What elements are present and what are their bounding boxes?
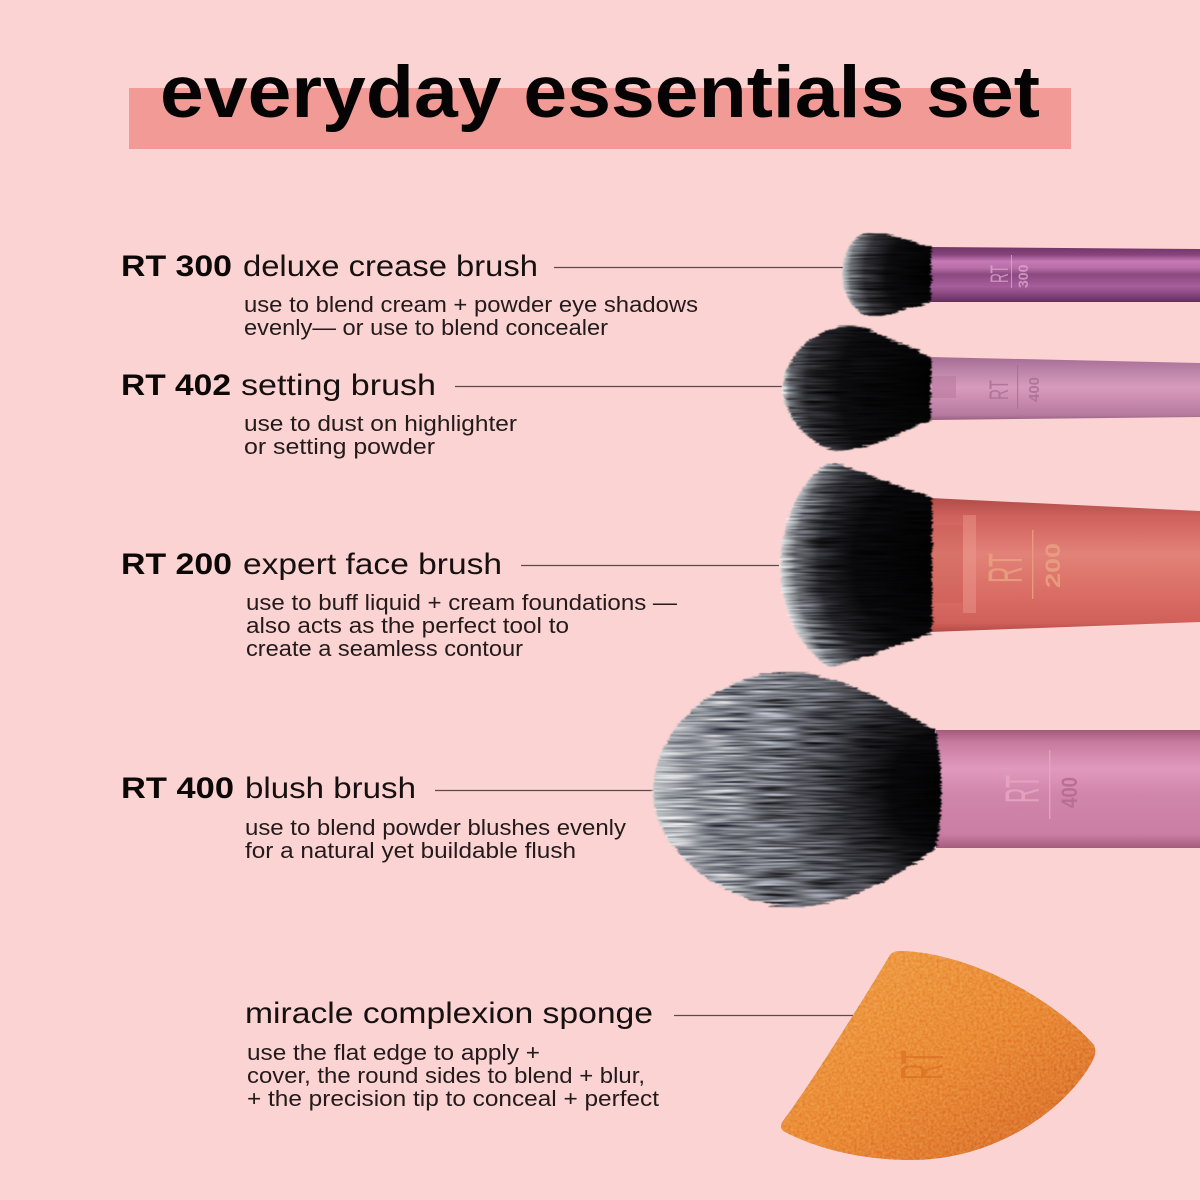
RT 200 description: also acts as the perfect tool to [246,613,569,638]
RT 300 handle [929,247,1200,302]
RT 300 handle logo [986,255,1031,288]
RT 200 handle [930,498,1200,632]
RT 402 handle logo: 400 [1026,377,1043,402]
title highlight bar [129,88,1071,149]
sponge body [781,951,1095,1160]
RT 402 handle [929,357,1200,420]
sponge: RT [889,1050,956,1080]
RT 400 heading: blush brush [245,772,416,805]
title text: everyday essentials set [160,52,1040,133]
RT 300 leader line [554,266,843,268]
RT 300 description [244,292,698,340]
label: RT 402 setting brush [121,369,782,459]
RT 200 heading [121,548,502,581]
sponge leader line [674,1014,855,1016]
RT 300 heading: RT 300 [121,250,232,283]
RT 402 description: or setting powder [244,434,435,459]
RT 400 description: for a natural yet buildable flush [245,838,576,863]
RT 200 leader line [521,564,779,566]
brush: RT 300 [842,232,1200,317]
sponge description: + the precision tip to conceal + perfect [247,1086,659,1111]
RT 200 bristles [780,463,932,667]
label: miracle complexion sponge [245,997,855,1111]
RT 402 handle logo: RT [984,380,1014,400]
RT 200 handle logo [980,530,1065,599]
RT 400 heading [121,772,416,805]
RT 402 handle band [932,376,956,398]
RT 200 description [246,590,677,661]
brush: RT 400 [653,672,1200,907]
RT 400 description [245,815,626,863]
brush: RT 200 [780,463,1200,667]
RT 300 heading [121,250,538,283]
RT 300 description: evenly— or use to blend concealer [244,315,608,340]
RT 400 leader line [435,790,654,792]
RT 300 heading: deluxe crease brush [243,250,538,283]
sponge description [247,1040,659,1111]
label: RT 400 blush brush [121,772,654,863]
RT 400 handle logo [997,750,1082,819]
RT 402 heading: RT 402 [121,369,231,402]
RT 402 description: use to dust on highlighter [244,411,517,436]
RT 400 handle logo: 400 [1057,777,1082,808]
RT 200 heading: RT 200 [121,548,232,581]
RT 300 description: use to blend cream + powder eye shadows [244,292,698,317]
RT 402 leader line [455,386,782,388]
RT 402 description [244,411,517,459]
RT 402 handle logo [984,365,1043,409]
sponge description: use the flat edge to apply + [247,1040,540,1065]
sponge description: cover, the round sides to blend + blur, [247,1063,645,1088]
RT 400 handle [936,730,1200,848]
title [129,52,1071,149]
RT 300 bristles [842,232,931,317]
RT 200 handle logo: RT [980,553,1033,583]
RT 402 bristles [783,326,931,450]
RT 300 handle logo: RT [986,265,1014,283]
RT 200 description: create a seamless contour [246,636,523,661]
brush: RT 402 [783,326,1200,450]
RT 300 handle logo: 300 [1015,264,1031,288]
RT 402 heading: setting brush [241,369,436,402]
sponge [781,951,1095,1160]
label: RT 200 expert face brush [121,548,779,661]
RT 200 handle logo: 200 [1042,543,1065,588]
RT 200 handle band [932,515,976,613]
RT 200 heading: expert face brush [243,548,502,581]
RT 402 heading [121,369,436,402]
sponge heading: miracle complexion sponge [245,997,653,1030]
RT 400 heading: RT 400 [121,772,234,805]
label: RT 300 deluxe crease brush [121,250,843,340]
RT 400 bristles [653,672,942,907]
RT 200 description: use to buff liquid + cream foundations — [246,590,677,615]
RT 400 handle logo: RT [997,775,1050,803]
RT 400 description: use to blend powder blushes evenly [245,815,626,840]
